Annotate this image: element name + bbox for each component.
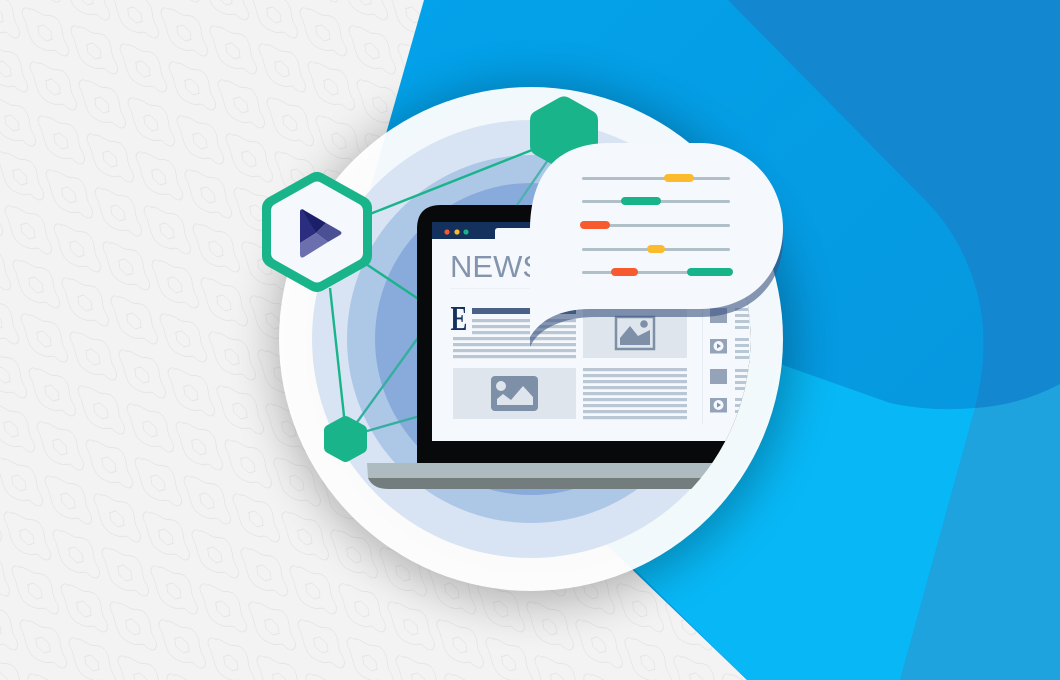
bubble shadow bbox=[530, 228, 783, 347]
top green hexagon bbox=[540, 106, 588, 160]
article text bbox=[453, 308, 576, 358]
laptop base bbox=[367, 463, 712, 489]
speech bubble bbox=[530, 143, 783, 347]
screen bbox=[432, 239, 750, 441]
image placeholder upper bbox=[583, 309, 687, 358]
browser bar bbox=[432, 222, 530, 239]
laptop bbox=[367, 205, 762, 489]
sliders bbox=[580, 174, 733, 276]
radar circles bbox=[279, 87, 783, 591]
image placeholder large bbox=[453, 368, 576, 419]
circle shadow bbox=[276, 87, 792, 603]
sidebar bbox=[702, 308, 749, 424]
play hexagon bbox=[274, 184, 360, 280]
newspaper logo: E bbox=[450, 299, 467, 338]
article text column bbox=[583, 368, 687, 419]
network connection lines bbox=[330, 150, 548, 433]
blue background shapes bbox=[370, 0, 1060, 680]
small green hexagon bbox=[330, 422, 361, 456]
headline: NEWS bbox=[450, 249, 543, 284]
laptop body bbox=[417, 205, 760, 463]
bubble body bbox=[530, 143, 783, 337]
icon: play bbox=[300, 209, 342, 258]
